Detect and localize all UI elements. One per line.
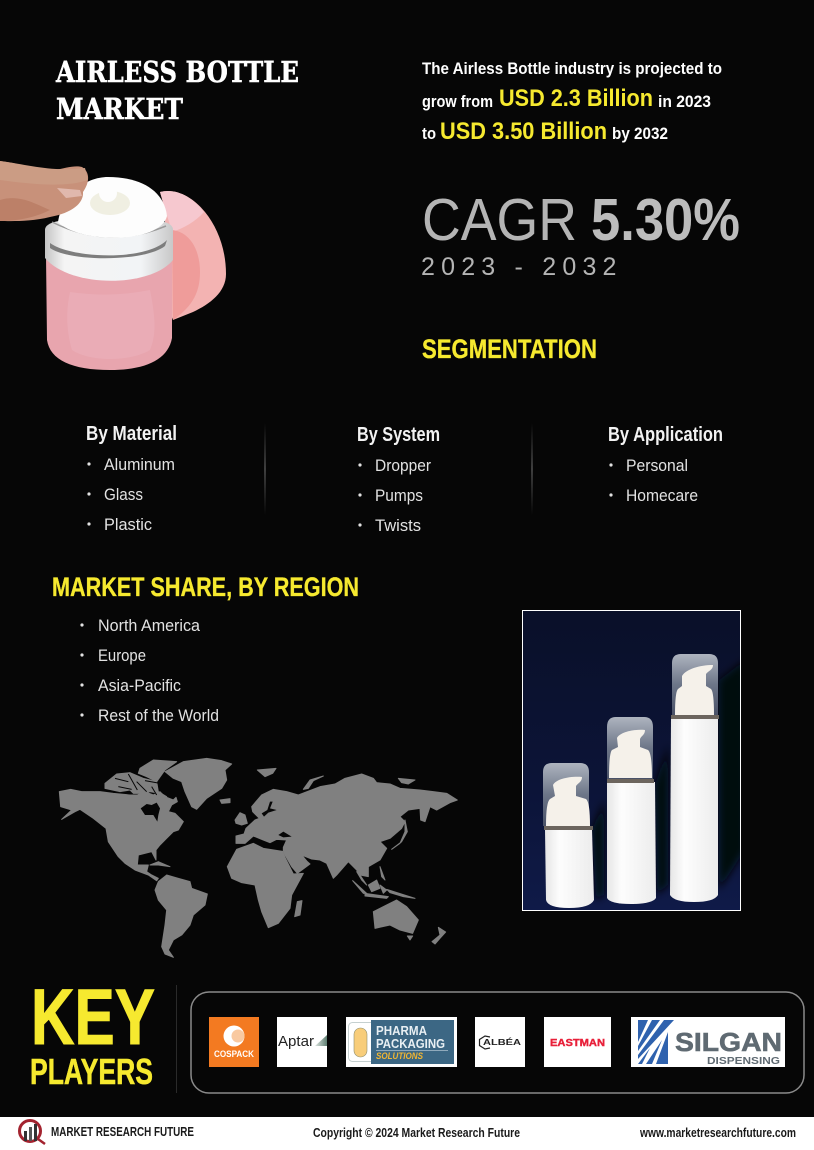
market projection text (422, 59, 722, 145)
logo: Pharma Packaging Solutions (346, 1017, 457, 1067)
logo: Albea (475, 1017, 525, 1067)
panel: by system (357, 424, 440, 535)
title: MARKET (56, 92, 183, 126)
small bottle (543, 763, 594, 908)
panel: by system: By System (357, 424, 440, 446)
panel: by material (86, 423, 177, 534)
logo: Silgan Dispensing: SILGAN (675, 1027, 782, 1057)
region list: Rest of the World (98, 706, 219, 725)
panel: key players logos (191, 992, 804, 1093)
market projection text: USD 3.50 Billion (440, 118, 607, 145)
CAGR (421, 187, 740, 281)
CAGR: 5.30% (591, 187, 740, 253)
footer: MARKET RESEARCH FUTURE (51, 1125, 194, 1139)
jar body (46, 256, 172, 370)
region list (80, 616, 219, 725)
market projection text: in 2023 (658, 92, 711, 111)
panel: by system: Dropper (375, 456, 431, 475)
logo: Cospack (209, 1017, 259, 1067)
CAGR: 2023 - 2032 (421, 253, 623, 281)
logo: Albea: ALBÉA (483, 1037, 521, 1047)
logo: Aptar (277, 1017, 327, 1067)
heading: key players: KEY (31, 972, 155, 1061)
title: AIRLESS BOTTLE (55, 55, 299, 89)
silver collar (45, 218, 173, 281)
logo: Aptar: Aptar (278, 1033, 314, 1050)
panel: by material: Aluminum (104, 455, 175, 474)
footer: Copyright © 2024 Market Research Future (313, 1126, 520, 1140)
panel: by application (608, 424, 723, 505)
heading: segmentation: SEGMENTATION (422, 334, 597, 364)
region list: North America (98, 616, 201, 635)
market projection text: USD 2.3 Billion (499, 85, 653, 112)
logo: Pharma Packaging Solutions: PACKAGING (376, 1036, 445, 1051)
jar lid (160, 191, 226, 320)
heading: key players (30, 972, 155, 1092)
photo: three airless bottles (522, 610, 745, 910)
panel: by material: Glass (104, 485, 143, 504)
panel: by material: By Material (86, 423, 177, 445)
logo: Cospack: COSPACK (214, 1049, 254, 1060)
logo: Eastman: EASTMAN (550, 1037, 605, 1049)
tall bottle (670, 654, 719, 902)
cream top (58, 177, 167, 238)
footer (0, 1117, 814, 1150)
heading: key players: PLAYERS (30, 1051, 153, 1092)
world map (59, 758, 457, 957)
medium bottle (607, 717, 656, 904)
heading: market share by region: MARKET SHARE, BY REGION (52, 572, 359, 602)
panel: by material: Plastic (104, 515, 152, 534)
market projection text: The Airless Bottle industry is projected to (422, 59, 722, 78)
market projection text: by 2032 (612, 124, 668, 143)
logo: Market Research Future (20, 1120, 45, 1144)
region list: Europe (98, 646, 146, 665)
market projection text: grow from (422, 92, 493, 111)
logo: Silgan Dispensing: DISPENSING (707, 1056, 780, 1067)
logo: Pharma Packaging Solutions: SOLUTIONS (376, 1051, 424, 1062)
panel: by system: Pumps (375, 486, 423, 505)
finger (0, 161, 88, 221)
illustration: pink airless jar (0, 161, 226, 370)
CAGR: CAGR (422, 187, 577, 253)
logo: Pharma Packaging Solutions: PHARMA (376, 1023, 428, 1038)
panel: by application: By Application (608, 424, 723, 446)
region list: Asia-Pacific (98, 676, 181, 695)
logo: Silgan Dispensing (631, 1017, 785, 1067)
panel: by application: Personal (626, 456, 688, 475)
title (55, 55, 299, 126)
logo: Eastman (544, 1017, 611, 1067)
market projection text: to (422, 124, 436, 143)
panel: by application: Homecare (626, 486, 698, 505)
panel: by system: Twists (375, 516, 421, 535)
